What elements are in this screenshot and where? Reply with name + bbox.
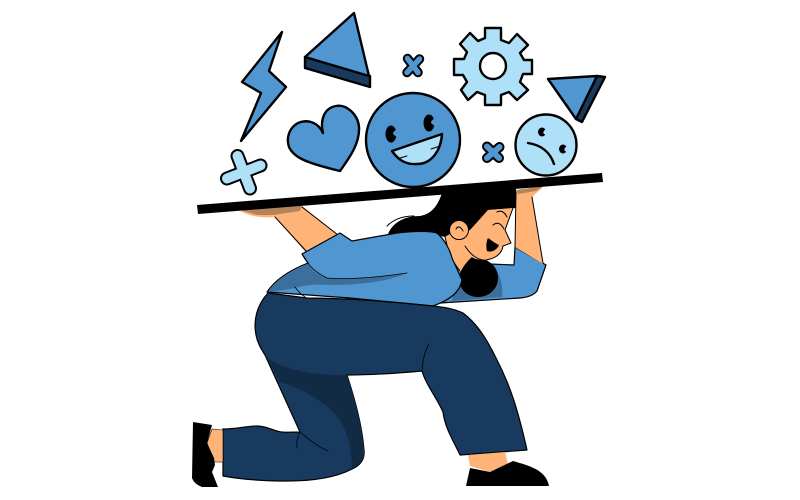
frown bbox=[528, 143, 554, 164]
right sleeve bbox=[440, 247, 546, 303]
right arm and hand bbox=[515, 186, 544, 264]
left eye bbox=[386, 126, 397, 142]
right eye bbox=[559, 144, 567, 154]
icon: lightning bolt bbox=[241, 32, 286, 141]
icon: gear bbox=[454, 28, 532, 105]
head bbox=[445, 208, 513, 272]
icon: smiling face bbox=[366, 93, 460, 187]
leg shadow bbox=[265, 355, 364, 468]
trousers bbox=[223, 293, 527, 481]
left eye bbox=[538, 128, 546, 136]
bent leg and thigh bbox=[223, 293, 527, 481]
back foot bbox=[192, 422, 223, 487]
shirt bbox=[267, 232, 462, 306]
plank bbox=[197, 173, 603, 214]
icon: small cross bottom bbox=[487, 146, 500, 158]
icon: sad face bbox=[516, 114, 576, 176]
hair back bbox=[387, 188, 516, 240]
front foot bbox=[466, 452, 549, 486]
icon: right prism bbox=[548, 76, 605, 122]
icon: small cross top bbox=[407, 58, 420, 72]
icon: heart bbox=[288, 106, 359, 171]
hair bun bbox=[459, 257, 498, 297]
left arm and hand bbox=[240, 205, 340, 254]
mouth bbox=[392, 134, 442, 164]
eyes bbox=[493, 211, 507, 229]
right eye bbox=[424, 114, 435, 132]
open mouth bbox=[486, 238, 499, 252]
icon: left prism bbox=[305, 13, 370, 87]
icon: light cross bbox=[227, 156, 260, 188]
shirt shadow bbox=[268, 254, 407, 297]
ear bbox=[450, 220, 468, 240]
